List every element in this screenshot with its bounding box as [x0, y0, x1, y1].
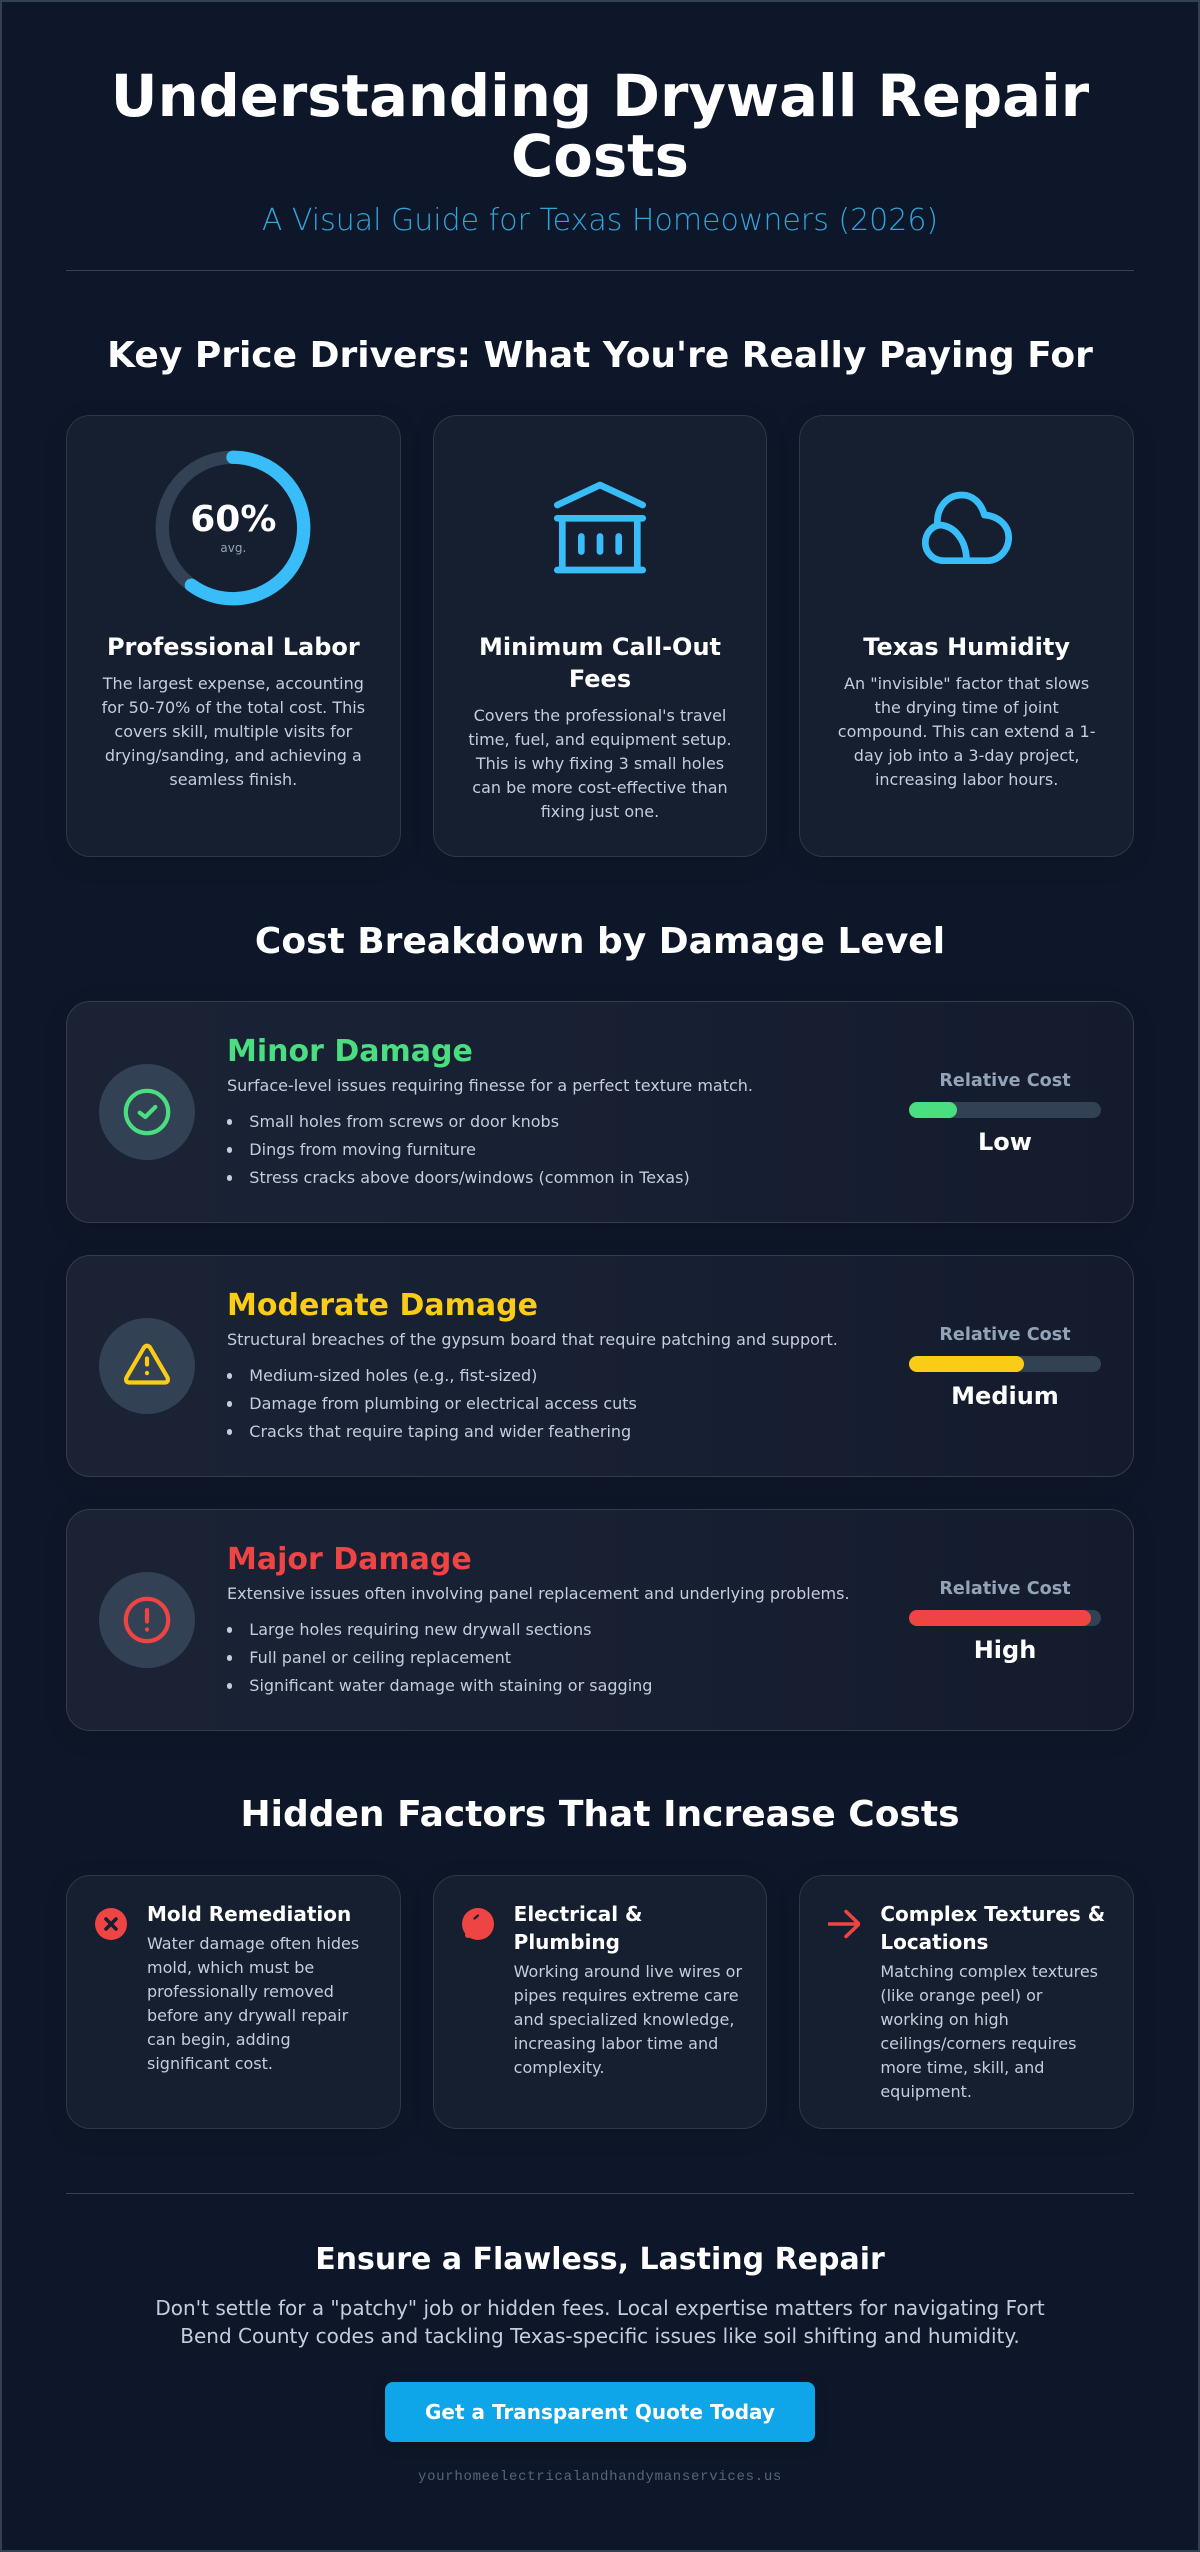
card title: Professional Labor [107, 633, 360, 661]
card text [102, 674, 365, 789]
factor text: ceilings/corners requires [880, 2034, 1076, 2053]
title: Costs [511, 123, 689, 190]
card text: increasing labor hours. [875, 770, 1058, 789]
card title [479, 633, 721, 693]
call to action button: Get a Transparent Quote Today [425, 2400, 775, 2424]
damage examples list: Damage from plumbing or electrical access cuts [249, 1394, 637, 1413]
factor text: can begin, adding [147, 2030, 291, 2049]
factor text: Water damage often hides [147, 1934, 359, 1953]
factor text [880, 1962, 1098, 2101]
card text: drying/sanding, and achieving a [105, 746, 362, 765]
donut chart: 60% average: avg. [220, 541, 246, 555]
closing text: Bend County codes and tackling Texas-specific issues like soil shifting and humidity. [180, 2324, 1020, 2348]
panel: minimum call-out fees [433, 415, 767, 857]
damage examples list: Dings from moving furniture [249, 1140, 476, 1159]
panel: electrical and plumbing [433, 1875, 767, 2129]
damage examples list: Cracks that require taping and wider feathering [249, 1422, 631, 1441]
card text: compound. This can extend a 1- [838, 722, 1096, 741]
title [111, 63, 1089, 190]
closing text [155, 2296, 1045, 2348]
heading: key price drivers: Key Price Drivers: What You're Really Paying For [107, 335, 1093, 376]
relative cost meter: medium [909, 1324, 1101, 1410]
panel: professional labor [66, 415, 401, 857]
card text: Covers the professional's travel [474, 706, 726, 725]
card text: An "invisible" factor that slows [844, 674, 1089, 693]
factor title [880, 1902, 1105, 1954]
factor text: Matching complex textures [880, 1962, 1098, 1981]
heading: cost breakdown: Cost Breakdown by Damage Level [255, 921, 945, 962]
damage examples list [227, 1366, 637, 1441]
factor text: (like orange peel) or [880, 1986, 1042, 2005]
damage title: Moderate Damage [227, 1288, 538, 1323]
card text: day job into a 3-day project, [854, 746, 1080, 765]
factor text: complexity. [514, 2058, 604, 2077]
relative cost meter: low: Low [978, 1128, 1032, 1156]
panel: moderate damage [66, 1255, 1134, 1477]
icon: check circle [99, 1064, 195, 1160]
relative cost meter: low: Relative Cost [939, 1070, 1071, 1090]
panel: mold remediation [66, 1875, 401, 2129]
factor title: Electrical & [514, 1902, 642, 1926]
damage description: Structural breaches of the gypsum board that require patching and support. [227, 1330, 838, 1349]
factor title [514, 1902, 642, 1954]
panel: texas humidity [799, 415, 1134, 857]
card text: seamless finish. [169, 770, 297, 789]
panel: minor damage [66, 1001, 1134, 1223]
icon: red blob [462, 1908, 494, 1940]
website footer: yourhomeelectricalandhandymanservices.us [418, 2468, 782, 2484]
factor title: Mold Remediation [147, 1902, 351, 1926]
subtitle: A Visual Guide for Texas Homeowners (2026) [262, 202, 938, 238]
icon: x circle [95, 1908, 127, 1940]
damage examples list: Medium-sized holes (e.g., fist-sized) [249, 1366, 537, 1385]
donut chart: 60% average [156, 450, 310, 606]
factor title: Plumbing [514, 1930, 620, 1954]
icon: cloud [922, 492, 1012, 564]
panel: major damage [66, 1509, 1134, 1731]
icon: alert circle [99, 1572, 195, 1668]
factor text [514, 1962, 742, 2077]
damage examples list: Large holes requiring new drywall sections [249, 1620, 591, 1639]
factor text: increasing labor time and [514, 2034, 718, 2053]
factor title: Locations [880, 1930, 988, 1954]
factor title: Complex Textures & [880, 1902, 1105, 1926]
panel: complex textures and locations [799, 1875, 1134, 2129]
card text: This is why fixing 3 small holes [476, 754, 724, 773]
card text: can be more cost-effective than [472, 778, 728, 797]
relative cost meter: low [909, 1070, 1101, 1156]
factor text: more time, skill, and [880, 2058, 1044, 2077]
damage examples list [227, 1620, 652, 1695]
factor text: pipes requires extreme care [514, 1986, 739, 2005]
damage examples list: Significant water damage with staining or sagging [249, 1676, 652, 1695]
card text: for 50-70% of the total cost. This [102, 698, 365, 717]
relative cost meter: high [909, 1578, 1101, 1664]
relative cost meter: medium: Medium [951, 1382, 1059, 1410]
card title: Fees [569, 665, 631, 693]
factor text [147, 1934, 359, 2073]
relative cost meter: high: High [974, 1636, 1036, 1664]
icon: warning triangle [99, 1318, 195, 1414]
card text: the drying time of joint [875, 698, 1059, 717]
closing text: Don't settle for a "patchy" job or hidden fees. Local expertise matters for navigating Fort [155, 2296, 1045, 2320]
factor text: and specialized knowledge, [514, 2010, 734, 2029]
factor text: significant cost. [147, 2054, 273, 2073]
factor text: mold, which must be [147, 1958, 314, 1977]
card text [468, 706, 732, 821]
factor text: Working around live wires or [514, 1962, 742, 1981]
damage title: Major Damage [227, 1542, 472, 1577]
factor text: professionally removed [147, 1982, 334, 2001]
card title: Minimum Call-Out [479, 633, 721, 661]
heading: hidden factors: Hidden Factors That Increase Costs [240, 1794, 960, 1835]
factor text: equipment. [880, 2082, 972, 2101]
card text: fixing just one. [541, 802, 659, 821]
damage examples list [227, 1112, 690, 1187]
card text: time, fuel, and equipment setup. [468, 730, 732, 749]
card text: covers skill, multiple visits for [114, 722, 352, 741]
factor text: before any drywall repair [147, 2006, 348, 2025]
damage description: Surface-level issues requiring finesse for a perfect texture match. [227, 1076, 753, 1095]
card text [838, 674, 1096, 789]
card text: The largest expense, accounting [103, 674, 364, 693]
arrow icon [828, 1910, 860, 1938]
call to action button [385, 2382, 815, 2442]
card title: Texas Humidity [863, 633, 1070, 661]
donut chart: 60% average: 60% [190, 499, 276, 540]
relative cost meter: medium: Relative Cost [939, 1324, 1071, 1344]
damage examples list: Full panel or ceiling replacement [249, 1648, 511, 1667]
factor text: working on high [880, 2010, 1009, 2029]
damage title: Minor Damage [227, 1034, 473, 1069]
icon: building [554, 482, 646, 574]
title: Understanding Drywall Repair [111, 63, 1089, 130]
damage examples list: Small holes from screws or door knobs [249, 1112, 559, 1131]
closing heading: Ensure a Flawless, Lasting Repair [315, 2242, 885, 2277]
damage examples list: Stress cracks above doors/windows (common in Texas) [249, 1168, 690, 1187]
damage description: Extensive issues often involving panel replacement and underlying problems. [227, 1584, 850, 1603]
relative cost meter: high: Relative Cost [939, 1578, 1071, 1598]
